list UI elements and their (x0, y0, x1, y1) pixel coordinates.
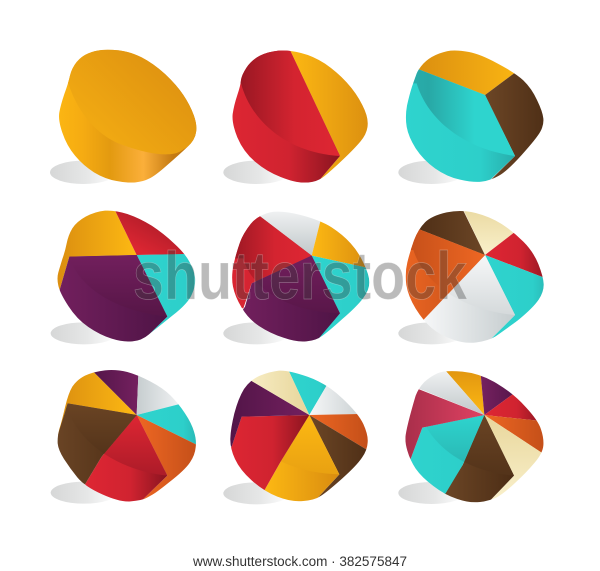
slice: orange (136, 415, 196, 500)
slice: brown (420, 211, 485, 255)
shadow (51, 322, 117, 344)
slice: white (423, 255, 515, 352)
slice: gold (58, 372, 136, 435)
slice: cream (247, 365, 309, 415)
slice: red (485, 233, 543, 278)
slice: cream (464, 211, 514, 255)
slice: white (136, 376, 178, 415)
pie chart 7: seven slices (50, 370, 196, 504)
shadow (223, 482, 290, 504)
slice: pink (400, 388, 484, 462)
slice: teal (312, 256, 370, 338)
pie chart 3: three slices (398, 50, 544, 184)
slice: red (232, 50, 340, 183)
slice: brown (50, 403, 137, 484)
shadow (223, 161, 290, 184)
slice: teal (289, 372, 326, 415)
slice: brown (443, 415, 514, 508)
slice: teal (136, 254, 196, 335)
pie chart 8: eight slices (223, 370, 368, 504)
slice: gold (443, 365, 484, 415)
footer text: www.shutterstock.com · 382575847 (192, 554, 407, 569)
slice: red (227, 415, 309, 491)
pie chart 6: six slices (398, 211, 544, 344)
slice: dark red (484, 385, 543, 421)
pie chart 2: two slices (223, 47, 377, 187)
slice: white (310, 386, 357, 415)
slice: gold (312, 222, 366, 268)
shadow (51, 482, 117, 504)
shadow (50, 161, 117, 184)
slice: teal (485, 255, 544, 339)
slice: purple (60, 255, 168, 342)
pie chart 4: four slices (50, 210, 196, 344)
slice: red (115, 211, 184, 255)
slice: gold (53, 208, 137, 292)
watermark: shutterstock (133, 238, 467, 314)
slice: gold (264, 415, 339, 512)
shadow (398, 161, 465, 184)
pie chart 9: nine slices (398, 365, 550, 508)
slice: purple (243, 256, 340, 342)
slice: white (260, 212, 320, 256)
slice: teal (406, 69, 515, 182)
slice: cream (484, 415, 550, 501)
slice: teal (403, 415, 484, 494)
gold slice (59, 50, 196, 183)
slice: orange (406, 230, 485, 320)
slice: red (232, 216, 312, 308)
slice: orange (310, 414, 368, 450)
slice: white (413, 365, 484, 415)
slice: gold (290, 51, 368, 180)
slice: teal (137, 404, 196, 444)
slice: purple (480, 365, 523, 415)
slice: purple (94, 370, 138, 415)
slice: gold (418, 50, 514, 95)
shadow (223, 322, 290, 344)
slice: brown (485, 73, 544, 180)
slice: brown (310, 415, 366, 498)
slice: orange (484, 415, 550, 455)
pie chart 5: five slices (223, 212, 370, 344)
shadow (398, 482, 465, 504)
shadow (398, 322, 465, 344)
slice: red (85, 415, 168, 502)
slice: purple (223, 380, 309, 448)
pie chart 1: single gold slice (50, 50, 196, 184)
